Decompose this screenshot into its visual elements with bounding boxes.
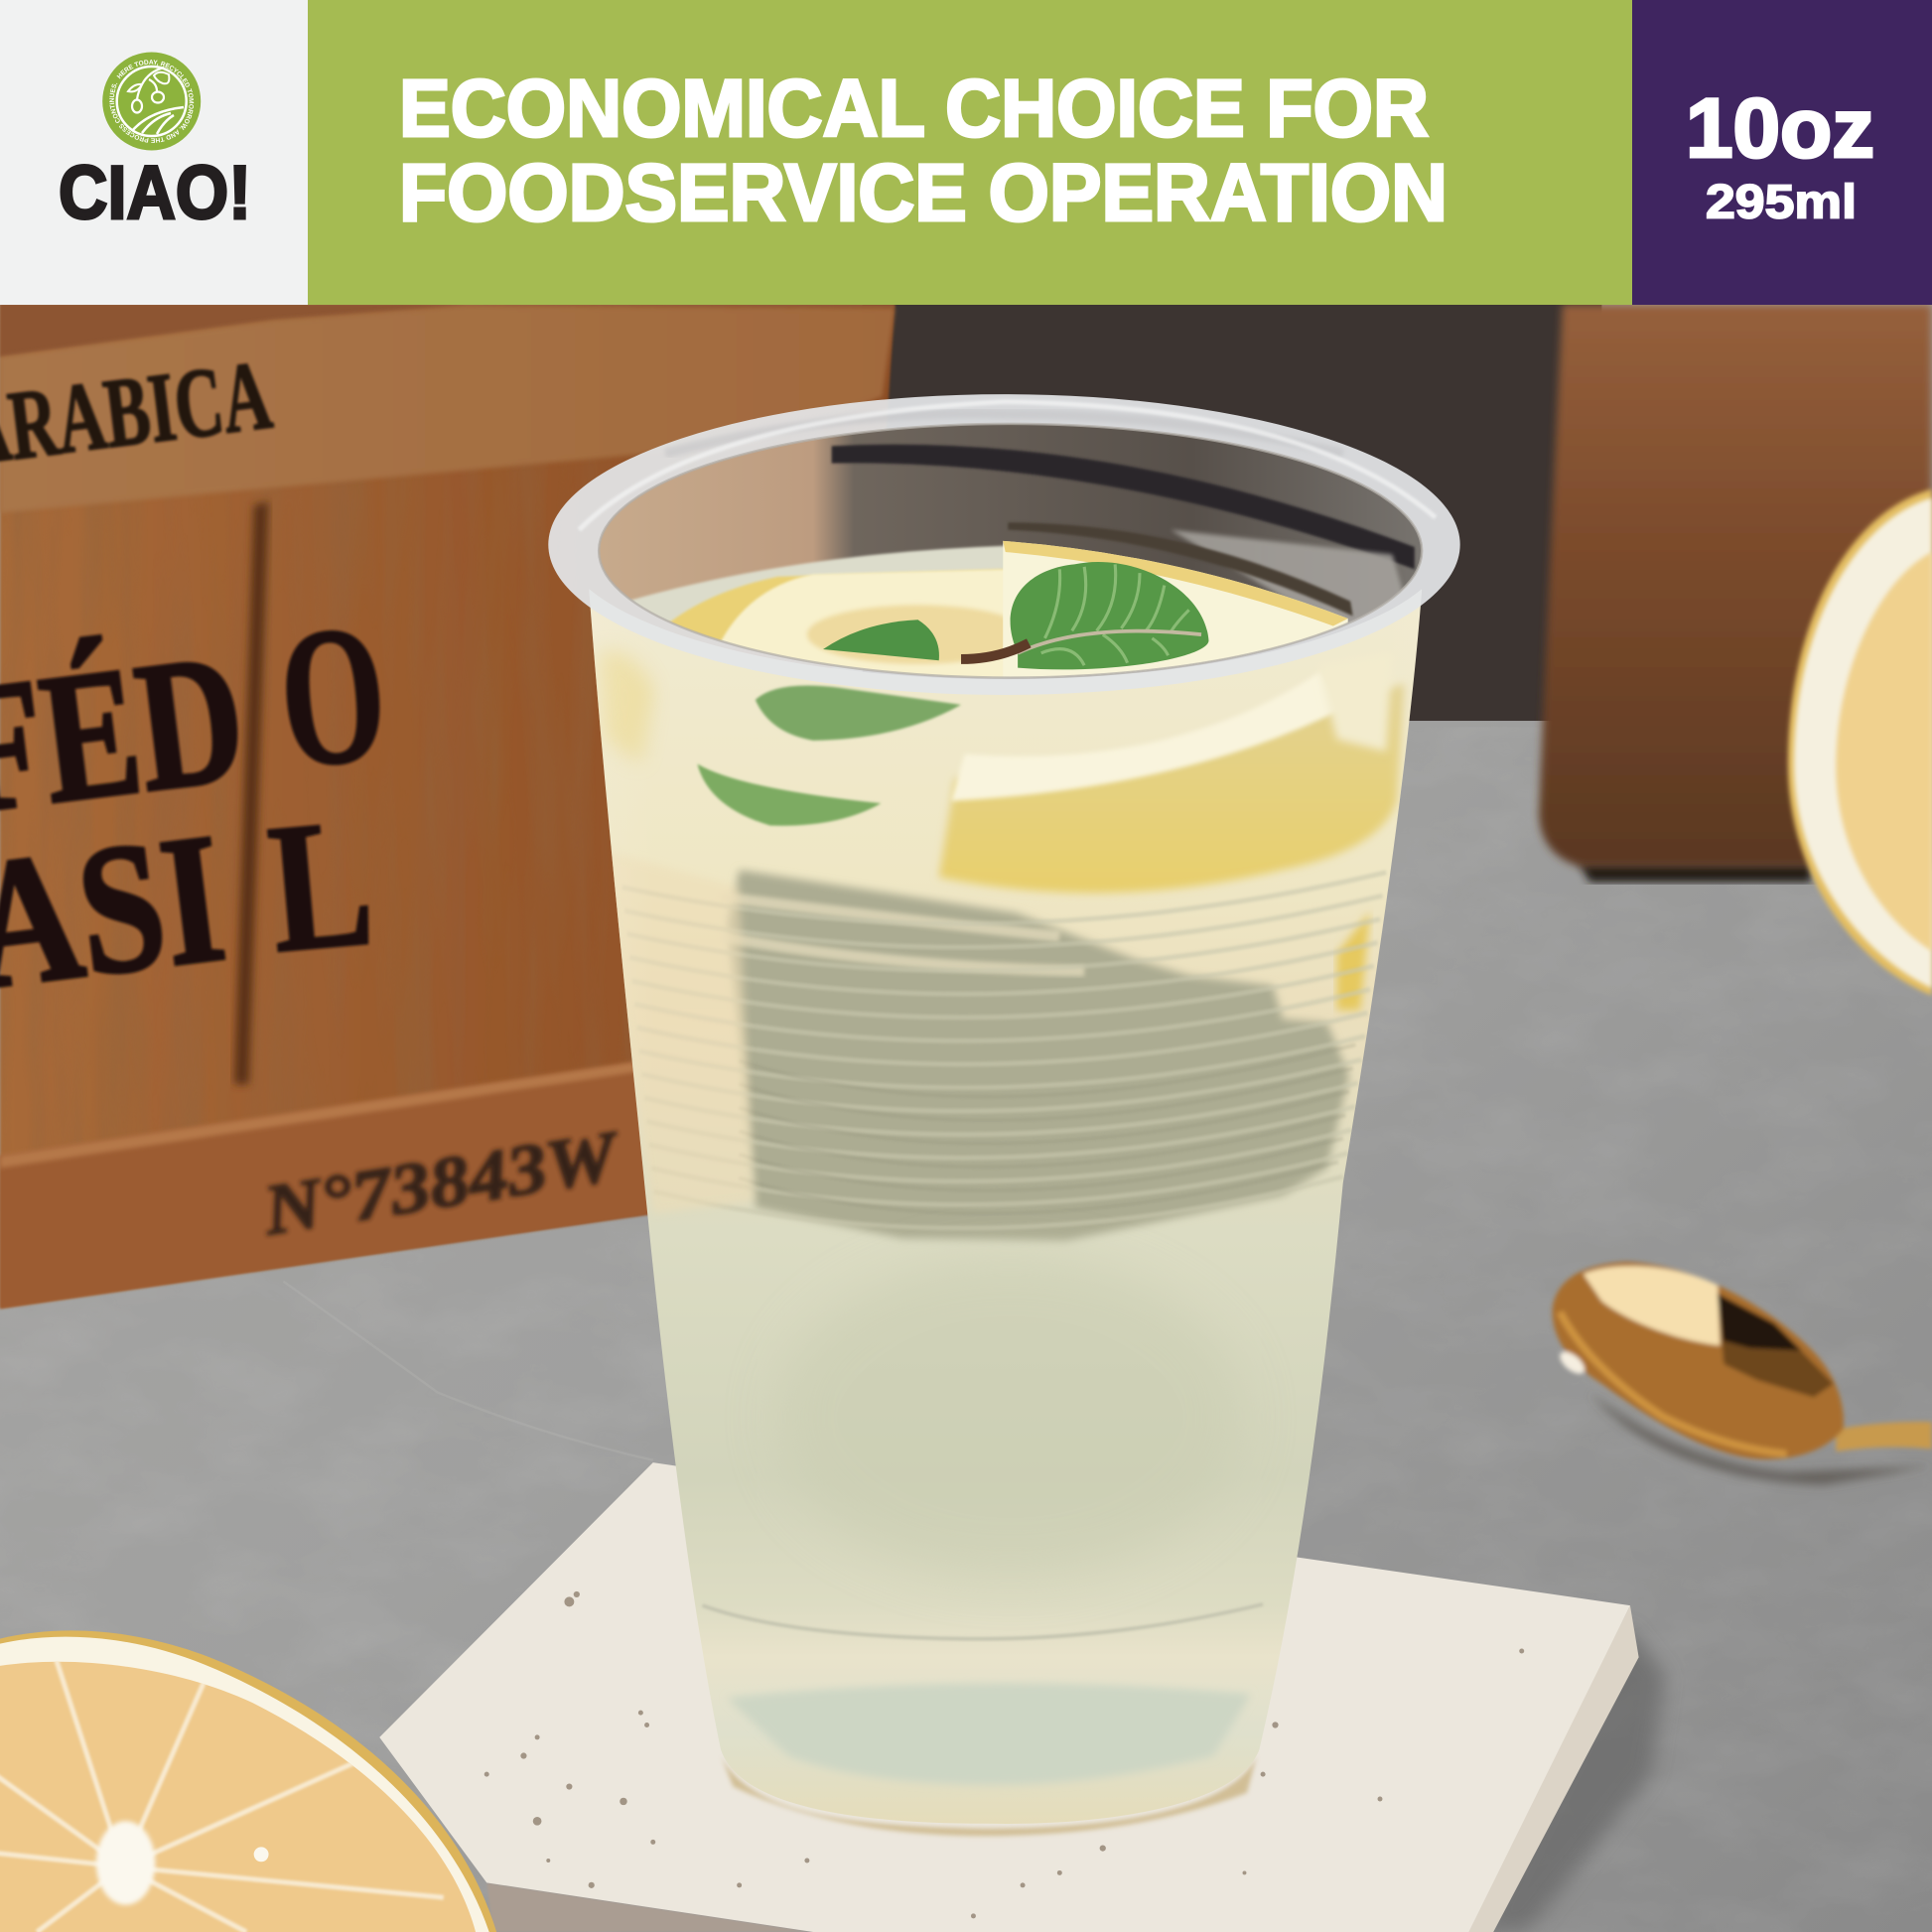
brand wordmark: CIAO! bbox=[59, 151, 251, 235]
header: size panel bbox=[1632, 0, 1932, 305]
lemon segments bbox=[0, 1657, 444, 1932]
cup body with drink bbox=[542, 554, 1478, 1836]
coaster front strip bbox=[486, 1882, 813, 1932]
crate stencil number: N°73843W bbox=[257, 1116, 627, 1251]
table surface mottling bbox=[0, 727, 1932, 1932]
header: headline panel bbox=[308, 0, 1632, 305]
wooden block shadow bbox=[1580, 863, 1811, 883]
cup sheen bbox=[542, 554, 1478, 1836]
wood grain bbox=[0, 305, 895, 1309]
top stripes cut through dark bbox=[721, 897, 1084, 971]
header: logo panel bbox=[0, 0, 308, 305]
spoon dark reflection bbox=[1718, 1294, 1834, 1397]
base line bbox=[702, 1604, 1263, 1639]
lemon slice bottom left bbox=[0, 1630, 496, 1932]
peach left band bbox=[604, 850, 755, 1213]
submerged mint leaf bbox=[756, 685, 961, 741]
coaster shadow bbox=[1478, 1626, 1666, 1932]
wooden crate bbox=[0, 305, 895, 1309]
gold spoon bbox=[1553, 1262, 1932, 1484]
lemon pale wedge bbox=[951, 671, 1343, 801]
submerged mint leaf lower bbox=[697, 763, 881, 826]
stone coaster bbox=[379, 1462, 1639, 1932]
lemon wheel pulp bbox=[807, 605, 1029, 664]
spoon shadow bbox=[1589, 1392, 1932, 1484]
coaster top bbox=[379, 1462, 1630, 1932]
ridge lines bbox=[622, 873, 1386, 1228]
table crack bbox=[283, 1282, 653, 1460]
ridge shadows bbox=[740, 1044, 1355, 1214]
dark wall bbox=[863, 305, 1601, 721]
pale wedge right bbox=[1318, 653, 1392, 752]
lemon core bbox=[96, 1821, 155, 1905]
rim top highlight bbox=[579, 402, 1436, 530]
headline line 1: ECONOMICAL CHOICE FOR bbox=[399, 64, 1429, 154]
dark gap behind slice bbox=[1008, 522, 1353, 617]
darker ridged middle bbox=[728, 870, 1349, 1241]
mint leaf large bbox=[1011, 562, 1208, 669]
spoon highlight bbox=[1584, 1266, 1721, 1345]
rim inner shadow bbox=[599, 424, 1422, 678]
crate stencil L: L bbox=[262, 779, 380, 992]
lemon wheel flesh bbox=[721, 569, 1003, 677]
interior reflection bbox=[832, 445, 1415, 569]
headline line 2: FOODSERVICE OPERATION bbox=[399, 148, 1448, 238]
cup interior above drink bbox=[599, 424, 1422, 678]
spoon lower glow bbox=[1560, 1312, 1787, 1453]
lemon yellow flash bbox=[1337, 911, 1370, 1011]
spoon glint bbox=[1556, 1347, 1588, 1378]
mint stem bbox=[961, 643, 1029, 659]
right lemon half bbox=[1788, 489, 1932, 996]
mint leaf small bbox=[823, 620, 939, 660]
coaster speckles bbox=[484, 1591, 1524, 1918]
spoon bowl bbox=[1553, 1262, 1844, 1459]
rim top shade bbox=[665, 414, 1343, 454]
rim band bbox=[548, 394, 1460, 695]
spoon handle bbox=[1836, 1422, 1932, 1451]
crate lower band bbox=[0, 1062, 653, 1309]
coaster side face bbox=[1466, 1605, 1639, 1932]
crate stencil O: O bbox=[272, 583, 394, 809]
crate lower band highlight bbox=[0, 1062, 635, 1169]
lemon under surface bbox=[939, 684, 1405, 893]
crate plank gap bbox=[234, 501, 269, 1084]
crate above band bbox=[0, 305, 895, 357]
cup rim bbox=[548, 394, 1460, 695]
lemon wheel rind bbox=[669, 568, 1003, 641]
interior pale patch bbox=[1172, 528, 1404, 623]
cup contact shadow bbox=[721, 1756, 1257, 1836]
size in ounces: 10oz bbox=[1686, 81, 1874, 175]
lower centre tone bbox=[776, 1257, 1244, 1578]
base tint bbox=[727, 1684, 1251, 1785]
logo badge: HERE TODAY, RECYCLED TOMORROW. AND THE PROCESS CONTINUES. bbox=[109, 60, 195, 143]
size in millilitres: 295ml bbox=[1706, 177, 1857, 228]
crate top band bbox=[0, 306, 895, 512]
drink far edge bbox=[631, 544, 1003, 621]
plastic cup bbox=[542, 394, 1478, 1836]
right wooden block bbox=[1539, 305, 1932, 868]
lemon tilted slice top bbox=[1003, 540, 1348, 677]
lemon wedge left bbox=[598, 650, 653, 763]
